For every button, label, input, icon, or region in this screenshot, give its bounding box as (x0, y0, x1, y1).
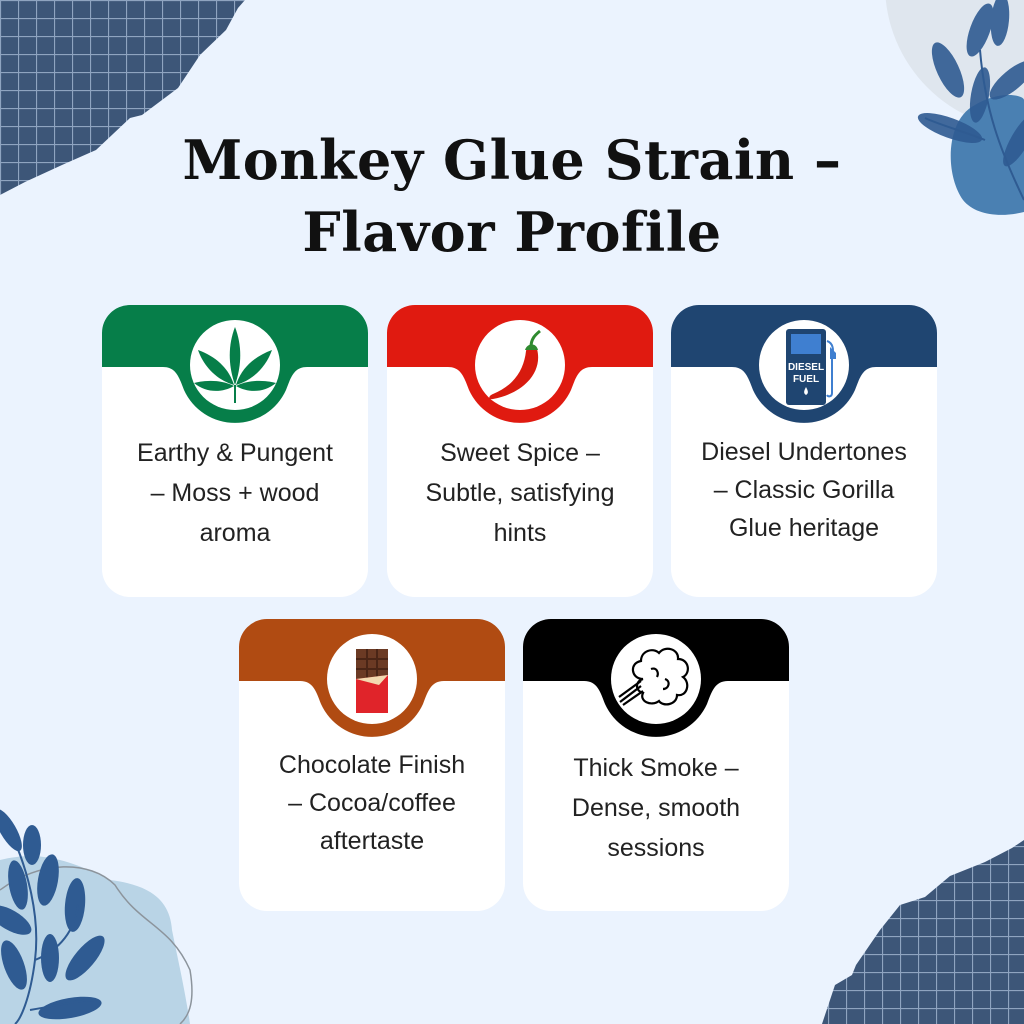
card: diesel (671, 305, 937, 597)
card: chocolate (239, 619, 505, 911)
card: smoke (523, 619, 789, 911)
card: earthy: – Moss + wood (151, 479, 319, 507)
card: diesel: FUEL (793, 374, 819, 385)
card: sweet spice (387, 305, 653, 597)
card: chocolate: aftertaste (320, 827, 424, 855)
card: chocolate: – Cocoa/coffee (288, 789, 456, 817)
grid patch bottom-right (822, 840, 1024, 1024)
card: diesel: Glue heritage (729, 514, 879, 542)
card: smoke: Thick Smoke – (573, 754, 739, 782)
card: earthy (102, 305, 368, 597)
card: diesel: DIESEL (788, 362, 824, 373)
card: sweet spice: hints (494, 519, 546, 547)
card: earthy: aroma (200, 519, 270, 547)
title (182, 128, 842, 264)
card: sweet spice: Subtle, satisfying (426, 479, 614, 507)
card: smoke: Dense, smooth (572, 794, 740, 822)
card: sweet spice: Sweet Spice – (440, 439, 600, 467)
card: diesel: – Classic Gorilla (714, 476, 894, 504)
grid patch top-left (0, 0, 245, 195)
card: earthy: Earthy & Pungent (137, 439, 333, 467)
card: smoke: sessions (607, 834, 705, 862)
title: Flavor Profile (302, 200, 722, 264)
card: chocolate: Chocolate Finish (279, 751, 465, 779)
title: Monkey Glue Strain – (182, 128, 842, 192)
card: diesel: Diesel Undertones (701, 438, 907, 466)
top-right circle and blob (885, 0, 1024, 215)
bottom-left blob with leaves (0, 805, 192, 1024)
